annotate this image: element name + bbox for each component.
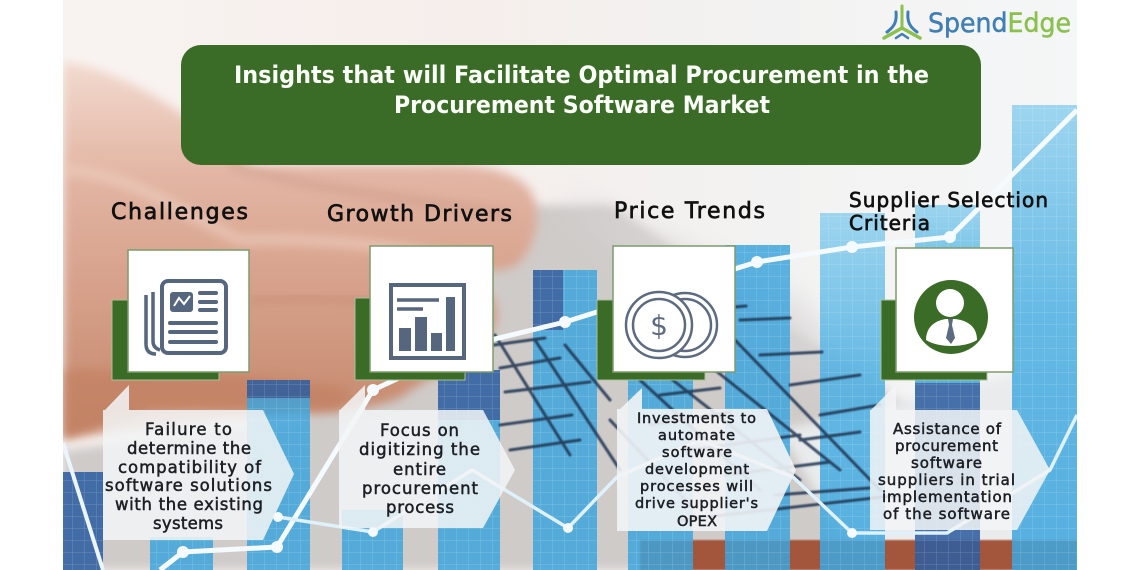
heading: Price Trends: Price Trends	[614, 199, 765, 224]
callout text: Failure to	[145, 420, 232, 439]
callout text: Investments to	[637, 411, 756, 427]
heading: Challenges: Challenges	[111, 200, 248, 225]
icon: bar chart report	[391, 285, 464, 358]
title text	[234, 61, 929, 119]
callout text: Assistance of	[893, 420, 1002, 438]
callout	[617, 388, 796, 531]
card	[613, 246, 735, 372]
keyboard keys	[494, 306, 900, 520]
card shadow	[597, 300, 705, 380]
callout text: procurement	[895, 437, 998, 455]
card	[896, 248, 1013, 372]
title banner	[181, 45, 981, 165]
callout text: implementation	[882, 488, 1012, 506]
callout text: Focus on	[380, 421, 459, 440]
laptop	[63, 202, 902, 570]
logo: SpendEdge	[884, 6, 1071, 39]
heading: Growth Drivers: Growth Drivers	[327, 202, 512, 227]
panel: price trends	[597, 199, 796, 531]
callout text	[105, 420, 272, 533]
heading: Supplier Selection Criteria: Criteria	[849, 211, 930, 235]
callout text: drive supplier's	[635, 496, 758, 512]
callout	[339, 385, 515, 528]
callout text: automate	[658, 428, 735, 444]
callout text: of the software	[883, 505, 1010, 523]
callout	[103, 385, 294, 540]
trend lines	[63, 110, 1077, 570]
callout text: with the existing	[115, 495, 263, 514]
table reflection	[640, 540, 1077, 570]
callout	[870, 385, 1050, 530]
icon: coins	[626, 292, 717, 358]
callout text	[359, 421, 480, 517]
callout text: processes will	[640, 479, 753, 495]
callout text	[635, 411, 758, 530]
card shadow	[355, 298, 465, 380]
icon: logo mark	[884, 6, 920, 38]
callout text: entire	[393, 460, 446, 479]
callout text	[878, 420, 1015, 523]
title text: Insights that will Facilitate Optimal Procurement in the	[234, 61, 929, 89]
card	[370, 246, 493, 372]
logo wordmark: SpendEdge	[928, 8, 1071, 39]
callout text: determine the	[127, 439, 251, 458]
card shadow	[112, 300, 219, 380]
panel: challenges	[103, 200, 294, 540]
callout text: compatibility of	[118, 458, 262, 477]
icon: newspaper	[146, 281, 226, 354]
callout text: digitizing the	[359, 440, 480, 459]
icon: person in circle	[914, 280, 988, 354]
callout text: OPEX	[677, 514, 717, 530]
title text: Procurement Software Market	[394, 91, 770, 119]
callout text: development	[645, 462, 749, 478]
chart bars	[63, 105, 1077, 570]
callout text: software	[911, 454, 982, 472]
callout text: software	[662, 445, 732, 461]
hand	[63, 62, 537, 440]
callout text: suppliers in trial	[878, 471, 1015, 489]
heading: Supplier Selection Criteria: Supplier Selection	[849, 188, 1048, 212]
callout text: procurement	[362, 479, 479, 498]
heading: Supplier Selection Criteria	[849, 188, 1048, 235]
panel: supplier selection criteria	[849, 188, 1050, 530]
callout text: systems	[153, 514, 223, 533]
card	[128, 250, 249, 372]
callout text: process	[386, 498, 454, 517]
card shadow	[881, 300, 987, 380]
panel: growth drivers	[327, 202, 515, 528]
callout text: software solutions	[105, 476, 272, 495]
dollar sign: $	[650, 309, 668, 342]
